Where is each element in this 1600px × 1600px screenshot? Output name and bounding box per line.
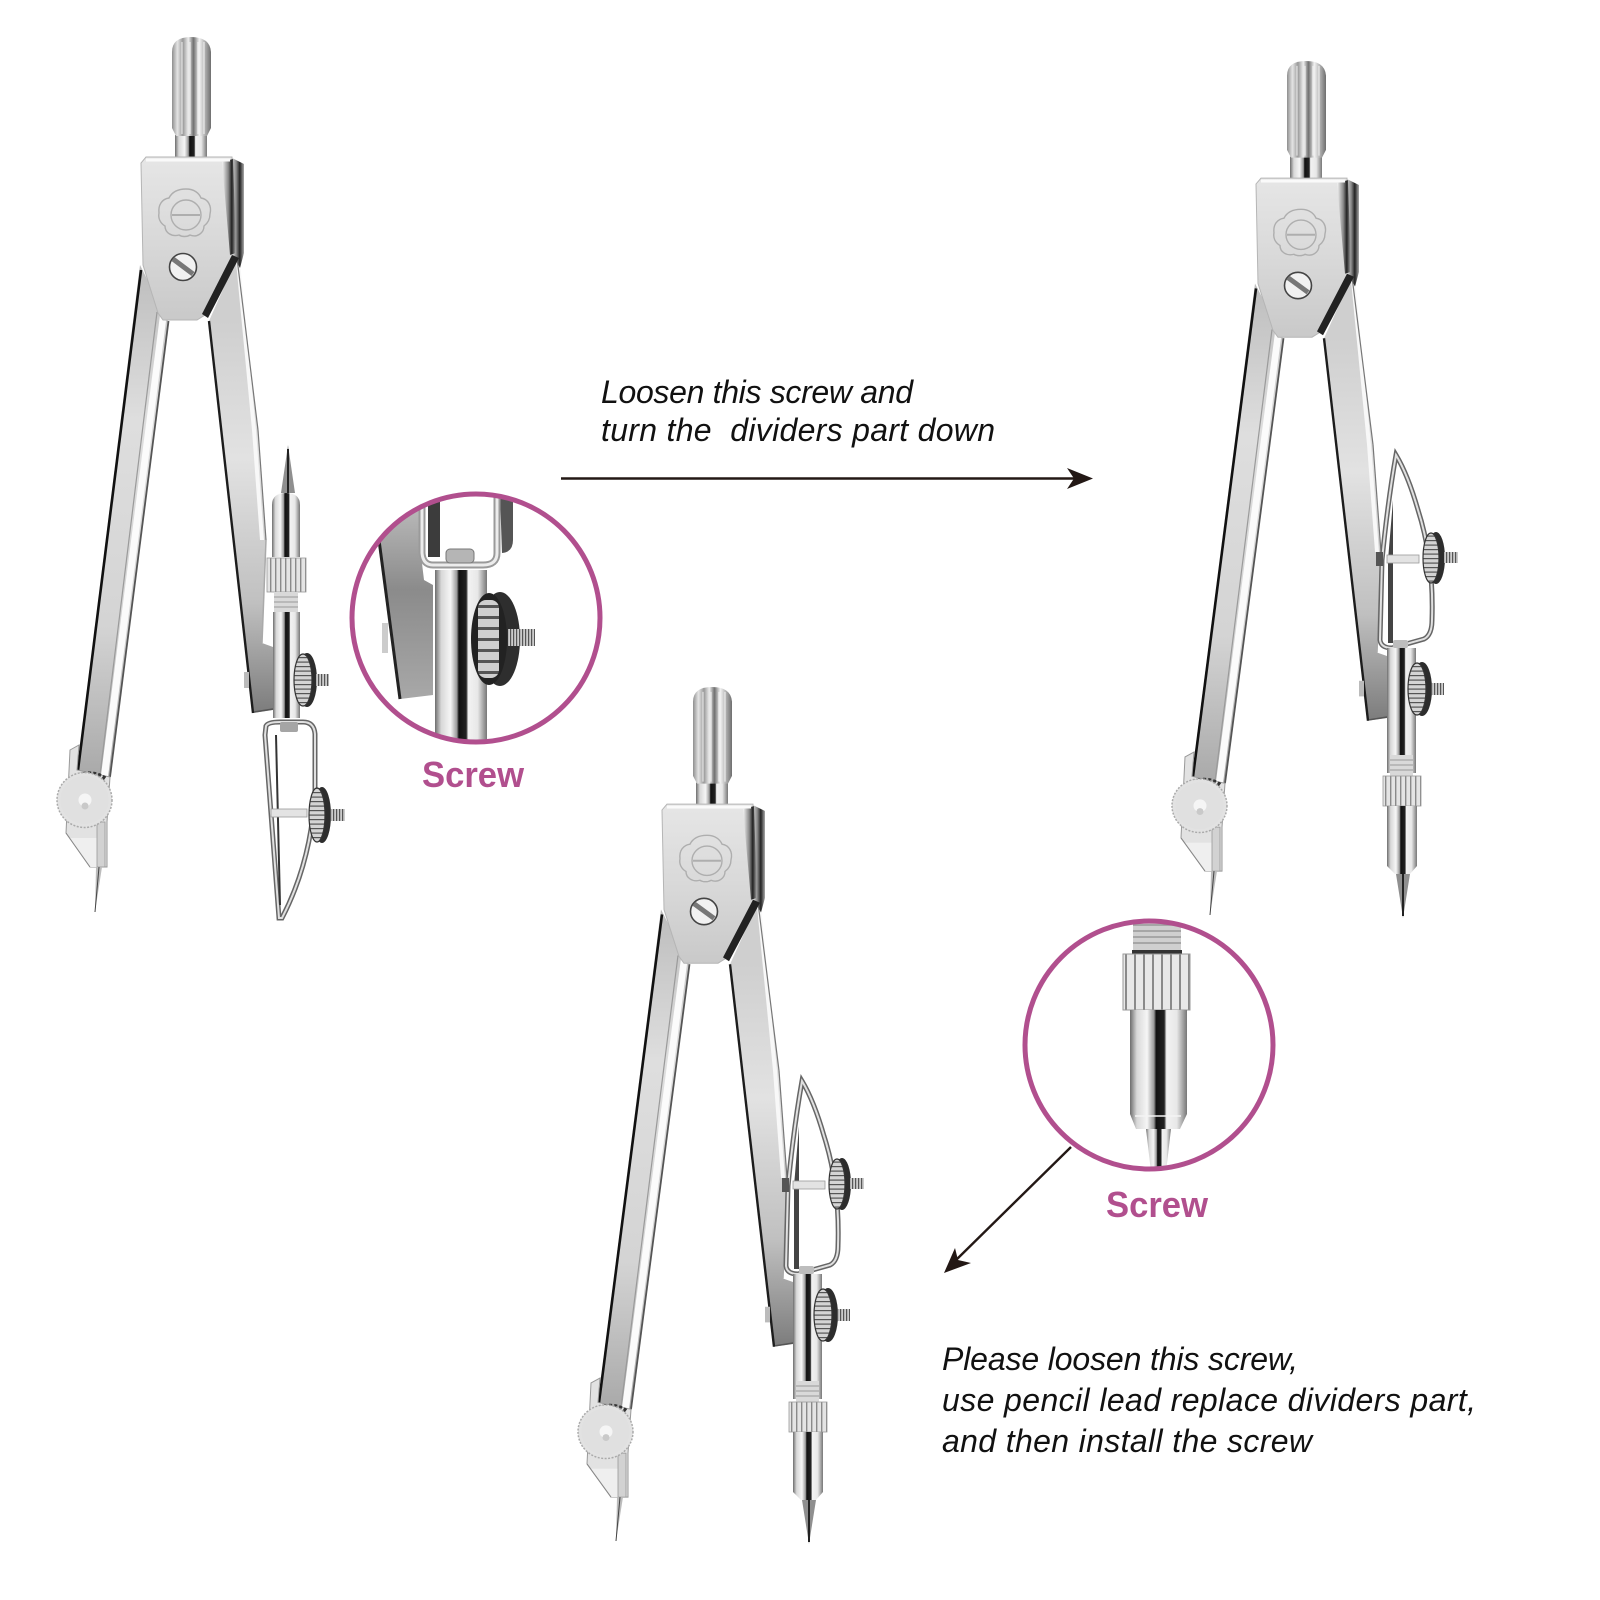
divider loop [265, 722, 345, 918]
instruction: loosen and turn [601, 374, 995, 448]
adjustment wheel [294, 653, 329, 707]
left leg [77, 265, 168, 777]
loop [1376, 455, 1458, 648]
label: Screw (right): Screw [1106, 1184, 1209, 1225]
zoom circle: tip screw detail [1025, 919, 1273, 1172]
tube [435, 570, 487, 750]
bracket [428, 502, 440, 557]
wheel [1408, 662, 1444, 716]
knob [172, 37, 211, 160]
dividers attachment pointing down [1376, 455, 1458, 918]
compass frame with knob, head and two legs [57, 37, 273, 912]
right leg [209, 258, 273, 713]
instruction: replace dividers with pencil lead [942, 1341, 1476, 1459]
instruction: loosen and turn: turn the dividers part down [601, 412, 995, 448]
collar [1123, 954, 1190, 1010]
logo [159, 189, 211, 236]
pin [446, 549, 474, 563]
dividers attachment pointing up [265, 445, 345, 918]
compass: top-right, dividers part folded down [1172, 61, 1458, 918]
thread [1133, 924, 1181, 950]
arrow: right [561, 468, 1093, 489]
barrel [1130, 1010, 1187, 1129]
leg foot with needle and wheel [57, 745, 112, 912]
head plate with logo and screw [141, 157, 244, 320]
compass: bottom-centre, pencil configuration [578, 687, 864, 1544]
cone [1146, 1129, 1171, 1166]
arm piece [379, 500, 433, 699]
compass frame [1172, 61, 1388, 915]
label: Screw (left): Screw [422, 754, 525, 795]
instruction: replace dividers with pencil lead: Please loosen this screw, [942, 1341, 1298, 1377]
compass: top-left, dividers part up [57, 37, 345, 918]
wheel [494, 592, 520, 686]
head screw [170, 254, 196, 280]
arrow: down-left [944, 1147, 1071, 1273]
instruction: loosen and turn: Loosen this screw and [601, 374, 914, 410]
instruction: replace dividers with pencil lead: use pencil lead replace dividers part, [942, 1382, 1476, 1418]
zoom circle: loop screw detail [352, 494, 600, 750]
instruction: replace dividers with pencil lead: and then install the screw [942, 1423, 1314, 1459]
screw [508, 629, 535, 646]
